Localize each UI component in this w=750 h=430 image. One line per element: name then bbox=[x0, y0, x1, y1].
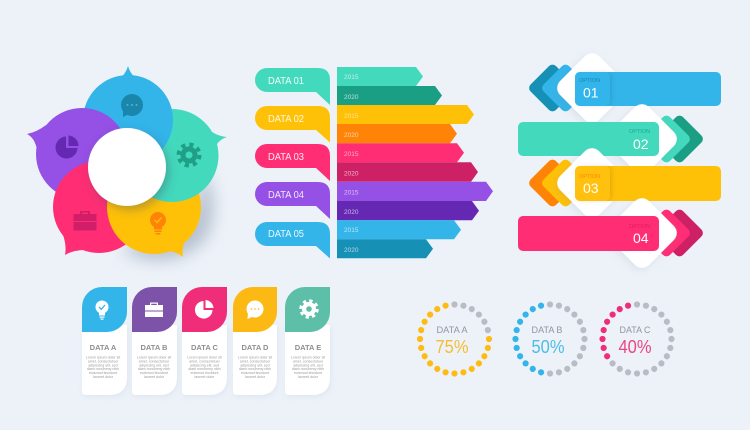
option label: OPTION bbox=[579, 174, 600, 180]
icon: briefcase bbox=[145, 302, 163, 317]
label: DATA 02: DATA 02 bbox=[268, 114, 304, 125]
bubble: yellow bbox=[107, 160, 201, 257]
icon: gear bbox=[301, 301, 317, 317]
card E text: euismod tincidunt bbox=[294, 371, 322, 375]
card A text: laoreet dolor bbox=[93, 375, 114, 379]
option label: OPTION bbox=[629, 224, 650, 230]
bar bbox=[575, 166, 721, 201]
card C text: laoreet dolor bbox=[195, 375, 215, 379]
gauge A label: DATA A bbox=[436, 325, 468, 335]
chevrons bbox=[527, 63, 591, 113]
gauge: DATA C bbox=[599, 301, 675, 377]
panel: options bbox=[518, 49, 721, 272]
bar: data 04 2015 bbox=[337, 182, 493, 201]
panel: dot gauges bbox=[417, 301, 675, 377]
gauge C value: 40% bbox=[618, 337, 652, 357]
bar: data 03 2020: 2020 bbox=[344, 170, 359, 178]
label: DATA 02 bbox=[255, 106, 330, 142]
icon: pie chart bbox=[56, 136, 79, 158]
bar: data 01 2015 bbox=[337, 67, 423, 86]
chevrons bbox=[641, 114, 705, 164]
bar bbox=[518, 216, 659, 251]
card D text bbox=[238, 356, 272, 379]
bar bbox=[518, 122, 659, 156]
label: DATA 04 bbox=[255, 182, 330, 219]
card B head bbox=[132, 287, 177, 332]
card D text: euismod tincidunt bbox=[241, 371, 269, 375]
icon: pie bbox=[195, 300, 214, 319]
label: DATA 03: DATA 03 bbox=[268, 152, 304, 163]
dot ring A bbox=[417, 301, 492, 377]
bar: data 05 2020: 2020 bbox=[344, 247, 359, 254]
panel: speech bubble cycle bbox=[27, 66, 227, 260]
bubble: blue overlap bbox=[132, 75, 173, 150]
card A text: amet, consectetuer bbox=[88, 359, 119, 363]
card B text: adipiscing elit, sed bbox=[139, 363, 169, 367]
card C text: adipiscing elit, sed bbox=[190, 363, 219, 367]
card B text: euismod tincidunt bbox=[140, 371, 168, 375]
card C text: euismod tincidunt bbox=[191, 371, 218, 375]
label: DATA 01 bbox=[255, 68, 330, 105]
bar: data 05 2015 bbox=[337, 220, 461, 239]
card D text: laoreet dolor bbox=[245, 375, 266, 379]
bar bbox=[575, 72, 721, 106]
white diamond bbox=[603, 100, 681, 178]
gauge: DATA A bbox=[417, 301, 492, 377]
card D title: DATA D bbox=[242, 343, 269, 352]
option 03 bbox=[527, 144, 721, 222]
bar: data 01 2020 bbox=[337, 86, 442, 105]
tab bbox=[575, 166, 610, 201]
card D text: Lorem ipsum dolor sit bbox=[238, 356, 272, 360]
bubble: green bbox=[126, 109, 227, 202]
bar: data 03 2020 bbox=[337, 162, 478, 182]
dot ring B bbox=[512, 301, 588, 377]
card D text: adipiscing elit, sed bbox=[240, 363, 270, 367]
card A text: euismod tincidunt bbox=[89, 371, 117, 375]
bar: data 02 2015: 2015 bbox=[344, 113, 359, 120]
bubble: purple bbox=[27, 108, 128, 200]
option label: OPTION bbox=[629, 129, 650, 135]
gauge C label: DATA C bbox=[620, 325, 651, 335]
chevrons bbox=[641, 208, 705, 258]
card C text: amet, consectetuer bbox=[189, 359, 221, 363]
card A text: adipiscing elit, sed bbox=[88, 363, 118, 367]
card E text: amet, consectetuer bbox=[293, 359, 324, 363]
card B text: laoreet dolor bbox=[144, 375, 165, 379]
gauge: DATA B bbox=[512, 301, 588, 377]
icon: gear bbox=[178, 144, 200, 166]
card A head bbox=[82, 287, 127, 332]
card B text: diam nonummy nibh bbox=[138, 367, 170, 371]
card D text: amet, consectetuer bbox=[240, 359, 271, 363]
bar: data 02 2015 bbox=[337, 105, 474, 124]
bar: data 04 2020: 2020 bbox=[344, 209, 359, 216]
number: 04 bbox=[633, 230, 649, 246]
card C text bbox=[187, 356, 222, 379]
gauge A value: 75% bbox=[436, 337, 468, 357]
card D bbox=[233, 287, 277, 395]
white diamond bbox=[553, 49, 631, 127]
option 01 bbox=[527, 49, 721, 127]
label: DATA 03 bbox=[255, 144, 330, 181]
bar: data 01 2015: 2015 bbox=[344, 74, 359, 81]
gauge B value: 50% bbox=[532, 337, 564, 357]
card E bbox=[285, 287, 330, 395]
card C head bbox=[182, 287, 227, 332]
label: DATA 04: DATA 04 bbox=[268, 190, 304, 201]
gauge B label: DATA B bbox=[532, 325, 563, 335]
card E text: Lorem ipsum dolor sit bbox=[291, 356, 325, 360]
bar: data 05 2015: 2015 bbox=[344, 227, 359, 234]
bar: data 01 2020: 2020 bbox=[344, 94, 359, 101]
card C text: Lorem ipsum dolor sit bbox=[187, 356, 222, 360]
bar: data 03 2015 bbox=[337, 143, 464, 162]
icon: bulb bbox=[96, 300, 108, 320]
tab bbox=[575, 72, 610, 106]
option 04 bbox=[518, 194, 705, 272]
card D head bbox=[233, 287, 277, 332]
card C title: DATA C bbox=[191, 343, 219, 352]
card B text: amet, consectetuer bbox=[139, 359, 170, 363]
card B title: DATA B bbox=[141, 343, 168, 352]
bar: data 04 2015: 2015 bbox=[344, 190, 359, 196]
bar: data 03 2015: 2015 bbox=[344, 151, 359, 158]
dot ring C bbox=[599, 301, 675, 377]
card B text: Lorem ipsum dolor sit bbox=[137, 356, 171, 360]
panel: data cards bbox=[82, 287, 330, 395]
card E head bbox=[285, 287, 330, 332]
chevrons bbox=[527, 158, 591, 208]
card E text: diam nonummy nibh bbox=[292, 367, 324, 371]
number: 02 bbox=[633, 136, 649, 152]
card E title: DATA E bbox=[295, 343, 321, 352]
bar: data 02 2020: 2020 bbox=[344, 132, 359, 139]
white diamond bbox=[553, 144, 631, 222]
card C bbox=[182, 287, 227, 395]
center circle bbox=[88, 128, 166, 206]
option 02 bbox=[518, 100, 705, 178]
icon: chat bbox=[246, 300, 264, 319]
icon: light bulb bbox=[150, 212, 166, 234]
icon: chat bbox=[121, 94, 143, 117]
bar: data 05 2020 bbox=[337, 239, 433, 258]
label: DATA 05 bbox=[255, 222, 330, 258]
label: DATA 01: DATA 01 bbox=[268, 76, 304, 87]
label: DATA 05: DATA 05 bbox=[268, 229, 304, 240]
number: 01 bbox=[583, 84, 599, 100]
card B text bbox=[137, 356, 171, 379]
bubble shadow bbox=[120, 170, 214, 260]
option label: OPTION bbox=[579, 78, 600, 84]
card B bbox=[132, 287, 177, 395]
card E text: laoreet dolor bbox=[298, 375, 319, 379]
icon: briefcase bbox=[74, 211, 96, 230]
card E text: adipiscing elit, sed bbox=[293, 363, 323, 367]
card D text: diam nonummy nibh bbox=[239, 367, 271, 371]
card A text: Lorem ipsum dolor sit bbox=[86, 356, 120, 360]
white diamond bbox=[603, 194, 681, 272]
bar: data 04 2020 bbox=[337, 201, 479, 220]
panel: data bars bbox=[255, 67, 493, 258]
card C text: diam nonummy nibh bbox=[188, 367, 221, 371]
card A text bbox=[86, 356, 120, 379]
card A title: DATA A bbox=[90, 343, 117, 352]
number: 03 bbox=[583, 180, 599, 196]
card A text: diam nonummy nibh bbox=[87, 367, 119, 371]
card E text bbox=[291, 356, 325, 379]
bubble: blue bbox=[83, 66, 173, 165]
bar: data 02 2020 bbox=[337, 124, 457, 143]
card A bbox=[82, 287, 127, 395]
bubble: pink bbox=[53, 161, 145, 255]
